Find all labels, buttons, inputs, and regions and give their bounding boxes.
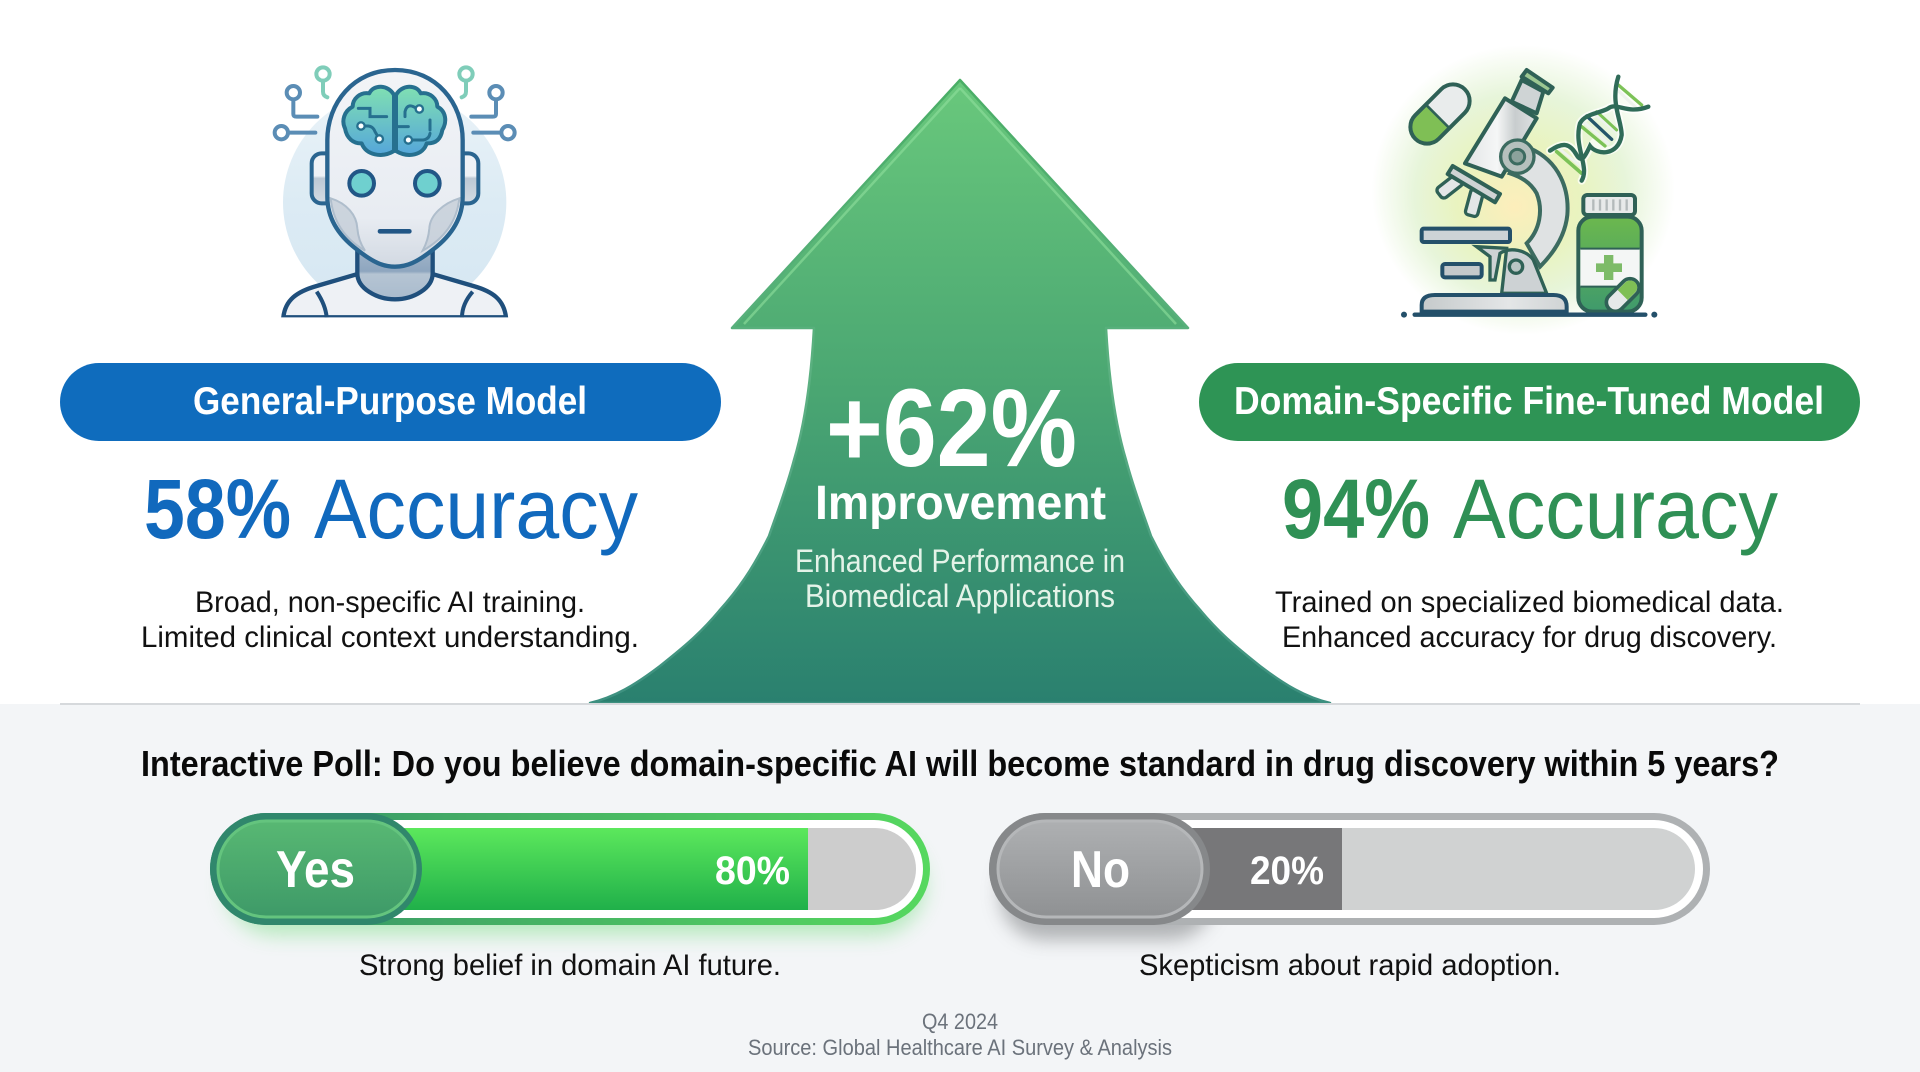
- description: Enhanced accuracy for drug discovery.: [1282, 621, 1777, 654]
- ground line: [1415, 308, 1645, 321]
- icon: AI robot head with brain: [275, 67, 515, 317]
- poll bar: no: [989, 813, 1710, 940]
- description: [141, 586, 639, 654]
- DNA strand: [1550, 77, 1648, 181]
- description: Trained on specialized biomedical data.: [1275, 586, 1784, 619]
- accuracy stat: [144, 462, 638, 556]
- accuracy stat: [1282, 462, 1778, 556]
- no knob: [989, 813, 1210, 925]
- accuracy stat: 58%: [144, 462, 291, 556]
- poll question: Interactive Poll: Do you believe domain-specific AI will become standard in drug discovery within 5 years?: [141, 743, 1779, 784]
- icon: microscope with DNA, capsule and medicine bottle: [1372, 45, 1675, 335]
- footer source: Q4 2024: [922, 1009, 998, 1034]
- pill title: General-Purpose Model: [193, 380, 587, 423]
- footer source: Source: Global Healthcare AI Survey & Analysis: [748, 1035, 1172, 1060]
- poll bar: yes: [210, 813, 930, 935]
- medicine bottle: [1578, 217, 1642, 312]
- brain: [343, 87, 445, 155]
- description: [1275, 586, 1784, 654]
- accuracy stat: Accuracy: [1453, 462, 1778, 556]
- panel: domain-specific model: [1199, 363, 1860, 654]
- description: Limited clinical context understanding.: [141, 621, 639, 654]
- yes knob: [210, 813, 422, 925]
- green model pill: [1199, 363, 1860, 441]
- blue model pill: [60, 363, 721, 441]
- yes knob: Yes: [276, 841, 355, 899]
- tube: [1512, 80, 1543, 113]
- capsule: [1403, 77, 1477, 151]
- improvement description: [795, 543, 1125, 614]
- improvement label: Improvement: [815, 477, 1106, 530]
- no knob: No: [1071, 841, 1130, 899]
- panel: general-purpose model: [60, 363, 721, 654]
- yes percent: 80%: [715, 849, 790, 893]
- description: Broad, non-specific AI training.: [195, 586, 585, 619]
- arm and stand: [1510, 148, 1568, 267]
- accuracy stat: 94%: [1282, 462, 1430, 556]
- objective lenses: [1435, 173, 1464, 200]
- no caption: Skepticism about rapid adoption.: [1139, 949, 1561, 982]
- poll section background: [0, 704, 1920, 1072]
- yes caption: Strong belief in domain AI future.: [359, 949, 781, 982]
- footer source: [748, 1009, 1172, 1060]
- no percent: 20%: [1250, 849, 1324, 893]
- improvement description: Biomedical Applications: [805, 578, 1115, 614]
- central upward arrow: [590, 80, 1330, 703]
- improvement figure: +62%: [826, 367, 1077, 490]
- accuracy stat: Accuracy: [314, 462, 638, 556]
- improvement description: Enhanced Performance in: [795, 543, 1125, 579]
- pill title: Domain-Specific Fine-Tuned Model: [1234, 380, 1824, 423]
